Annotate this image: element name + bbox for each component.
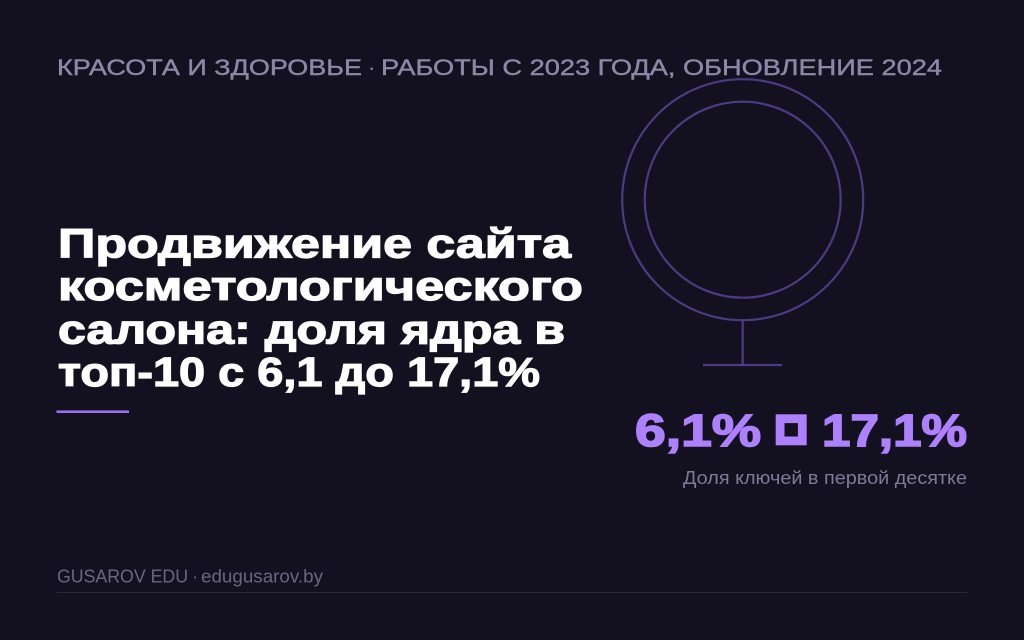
key metric: 6.1% to 17.1%: 17,1%	[822, 405, 967, 456]
title: салона: доля ядра в	[58, 306, 565, 352]
kicker: category and dates: ·	[368, 55, 375, 80]
icon: round mirror on a stand	[622, 79, 863, 365]
kicker: category and dates	[57, 55, 942, 80]
kicker: category and dates: КРАСОТА И ЗДОРОВЬЕ	[57, 55, 362, 80]
kicker: category and dates: РАБОТЫ С 2023 ГОДА, ОБНОВЛЕНИЕ 2024	[381, 55, 942, 80]
title: топ-10 с 6,1 до 17,1%	[58, 349, 540, 395]
key metric: 6.1% to 17.1%	[635, 405, 967, 456]
title: Продвижение сайта	[58, 220, 573, 266]
footer: source: edugusarov.by	[201, 566, 323, 586]
metric caption: Доля ключей в первой десятке	[683, 468, 967, 488]
title: косметологического	[58, 263, 583, 309]
title accent line	[56, 410, 129, 413]
footer: source: ·	[192, 566, 198, 586]
title	[58, 220, 583, 395]
footer: source: GUSAROV EDU	[57, 566, 188, 586]
key metric: 6.1% to 17.1%: 6,1%	[635, 405, 761, 456]
footer: source	[57, 566, 323, 586]
